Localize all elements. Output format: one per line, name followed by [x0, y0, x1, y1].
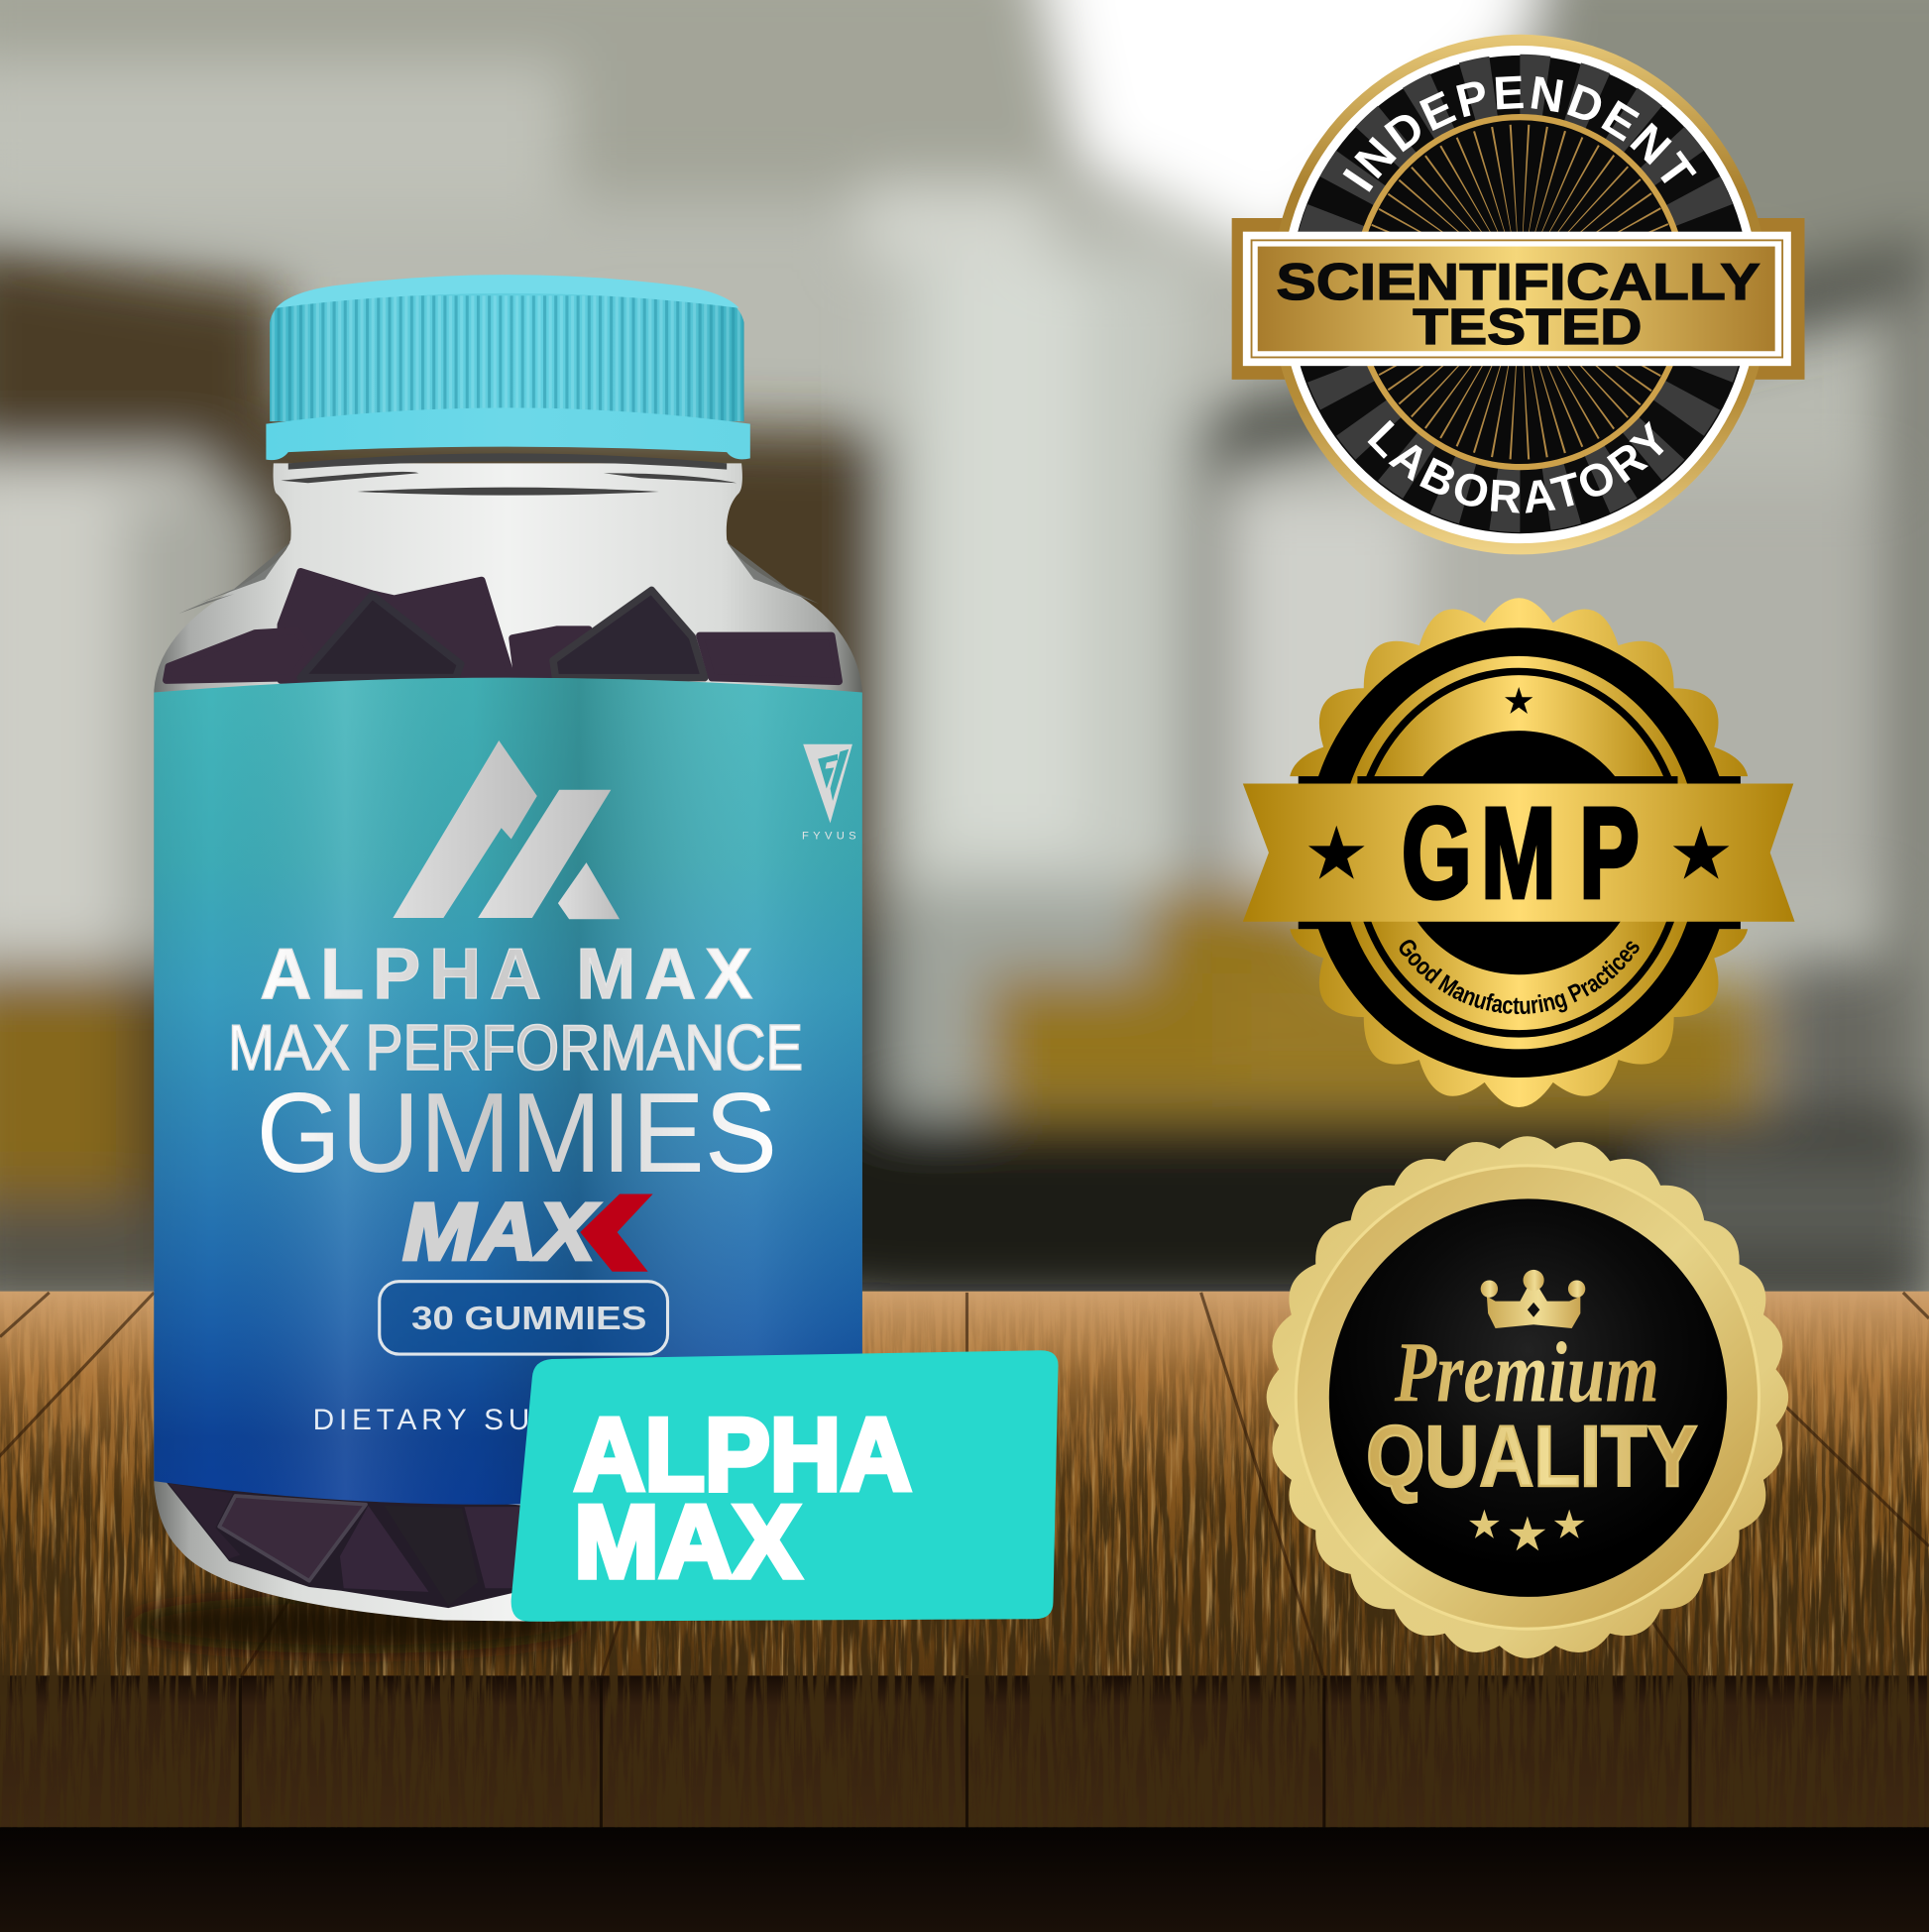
concentric rings [1299, 627, 1741, 1078]
label [154, 678, 862, 1505]
gmp heading: GMP [1402, 781, 1640, 925]
scalloped gold seal [1279, 598, 1759, 1107]
bottle cap [266, 275, 750, 460]
left star [1308, 826, 1365, 879]
gummy count pill: 30 GUMMIES [411, 1301, 646, 1337]
badge: premium quality [1267, 1136, 1788, 1658]
white banner [1243, 232, 1791, 366]
scalloped gold seal [1267, 1136, 1788, 1658]
max mark: MAX [402, 1187, 600, 1277]
fyvus logo [802, 744, 856, 842]
table front edge [0, 1675, 1929, 1827]
neck highlights [281, 453, 737, 496]
inner sunburst disc [1355, 117, 1685, 467]
gummy count pill [380, 1282, 668, 1354]
product tagline: MAX PERFORMANCE [228, 1012, 803, 1083]
blurred room background [0, 0, 1929, 1312]
badge: gmp [1243, 598, 1794, 1107]
label sheen [154, 678, 862, 1505]
cap ribbed body [270, 276, 744, 421]
supplement line: DIETARY SU [313, 1404, 529, 1436]
gold banner outline [1252, 240, 1782, 357]
bottle shadow [123, 1594, 591, 1653]
gold ribbon [1243, 784, 1795, 922]
arc text independent: INDEPENDENT [1342, 75, 1697, 192]
three stars [1469, 1510, 1585, 1550]
card wordmark: ALPHA [574, 1397, 912, 1513]
banner subheading: TESTED [1413, 298, 1642, 355]
gold rim [1271, 35, 1768, 554]
card wordmark [574, 1397, 912, 1600]
cap top rim [276, 275, 739, 308]
shoulder shadows [178, 542, 819, 614]
gmp arc caption: Good Manufacturing Practices [1400, 940, 1640, 1015]
arc text laboratory: LABORATORY [1368, 420, 1663, 513]
gummies word: GUMMIES [256, 1071, 777, 1196]
teal brand card [511, 1350, 1059, 1622]
bottle [154, 453, 862, 1622]
glass jar [154, 463, 862, 1622]
brand mountain logo [393, 740, 620, 919]
premium script: Premium [1394, 1323, 1659, 1420]
card wordmark: MAX [574, 1484, 801, 1600]
right star [1673, 826, 1729, 879]
wooden table top [0, 1292, 1929, 1679]
quality heading: QUALITY [1366, 1409, 1697, 1505]
cap lower ring [266, 407, 750, 460]
table lower shelf [0, 1827, 1929, 1932]
crown icon [1481, 1270, 1585, 1328]
top star [1505, 687, 1532, 714]
gummies bottom [167, 1482, 529, 1608]
banner heading: SCIENTIFICALLY [1276, 254, 1760, 311]
fyvus logo: FYVUS [802, 830, 856, 842]
thin rim [1296, 1166, 1759, 1629]
product name: ALPHA MAX [260, 935, 752, 1014]
badge: scientifically tested [1231, 34, 1804, 555]
badge back ribbon [1232, 218, 1804, 380]
black centre [1329, 1198, 1727, 1597]
gold banner fill [1258, 247, 1775, 351]
gummies top [167, 572, 839, 681]
segmented dark ring [1323, 86, 1717, 501]
